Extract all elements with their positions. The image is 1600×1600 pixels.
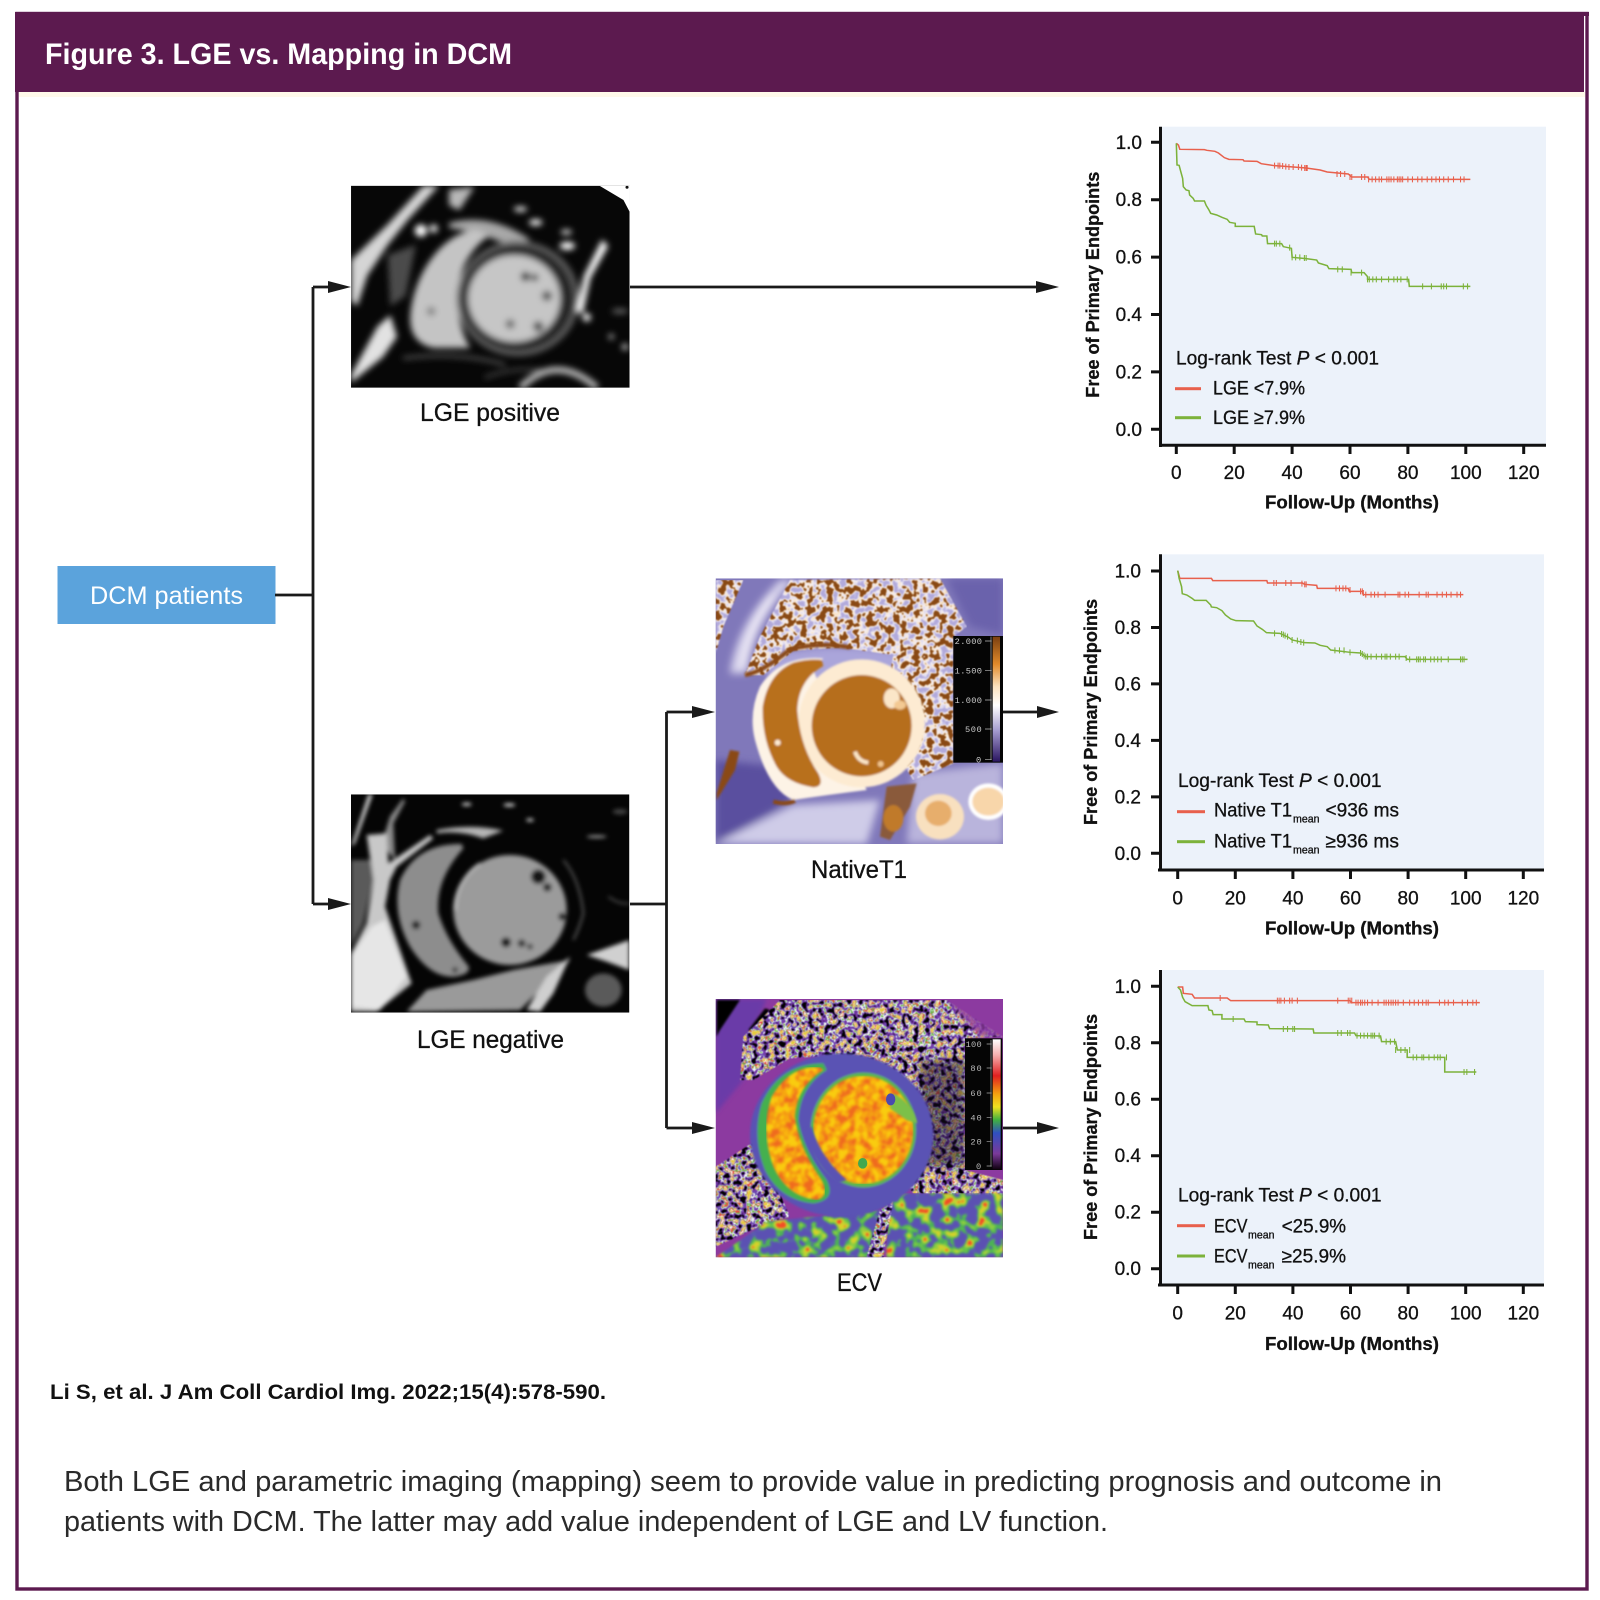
y axis tick labels: 0.0	[1116, 420, 1142, 441]
legend: T1 colour bar: 1.500	[955, 666, 982, 676]
y axis tick labels: 0.8	[1116, 190, 1142, 211]
header: title bar	[15, 12, 1589, 97]
label: LGE positive: LGE positive	[420, 399, 560, 427]
image: LGE positive scan	[351, 186, 630, 388]
legend: ECV colour bar: 40	[970, 1113, 982, 1123]
x axis tick labels: 80	[1397, 463, 1418, 484]
arrow: ECV to chart	[1003, 1122, 1059, 1134]
x axis tick labels: 120	[1507, 1303, 1539, 1324]
y axis tick labels: 0.2	[1116, 362, 1142, 383]
legend: ECV colour bar	[965, 1038, 1002, 1172]
curves	[1178, 571, 1468, 662]
x axis tick labels: 20	[1224, 463, 1245, 484]
legend: LGE <7.9%	[1213, 379, 1305, 400]
y axis tick labels: 0.6	[1115, 674, 1141, 695]
y axis tick labels: 0.4	[1116, 305, 1142, 326]
legend: T1 colour bar: 1.000	[955, 696, 982, 706]
speckle: pericardial fat	[745, 578, 967, 780]
legend: ECV	[1214, 1217, 1248, 1238]
y axis tick labels: 0.8	[1115, 1033, 1141, 1054]
image: ECV map	[716, 999, 1003, 1257]
x axis title: Follow-Up (Months)	[1265, 492, 1439, 512]
speckle: top and right	[740, 1000, 1003, 1197]
legend: ECV colour bar: 20	[970, 1138, 982, 1148]
legend: <25.9%	[1282, 1217, 1346, 1238]
image: LGE negative scan	[351, 794, 629, 1013]
x axis tick labels: 60	[1340, 888, 1361, 909]
y axis tick labels: 0.8	[1115, 618, 1141, 639]
legend: <936 ms	[1326, 801, 1399, 822]
y axis tick labels: 0.6	[1116, 248, 1142, 269]
legend: Log-rank Test P < 0.001	[1176, 348, 1379, 369]
legend: mean	[1248, 1230, 1274, 1242]
legend: ECV colour bar: 100	[966, 1040, 982, 1050]
x axis tick labels	[1171, 463, 1540, 484]
image: Native T1 map	[716, 578, 1008, 844]
y axis title: Free of Primary Endpoints	[1083, 172, 1103, 398]
legend: T1 colour bar: 500	[965, 725, 982, 735]
legend: Log-rank Test P < 0.001	[1178, 1186, 1382, 1207]
x axis tick labels: 20	[1225, 888, 1246, 909]
curves	[1176, 143, 1470, 289]
x axis tick labels: 100	[1450, 888, 1482, 909]
x axis title: Follow-Up (Months)	[1265, 918, 1439, 938]
legend: ≥25.9%	[1282, 1247, 1346, 1268]
legend: Native T1	[1214, 801, 1292, 822]
x axis tick labels: 120	[1507, 888, 1539, 909]
legend	[1177, 771, 1399, 856]
y axis tick labels: 1.0	[1116, 133, 1142, 154]
legend: T1 colour bar: 2.000	[955, 637, 982, 647]
x axis tick labels: 0	[1172, 1303, 1183, 1324]
arrow: Native T1 to chart	[1003, 706, 1059, 718]
y axis tick labels: 1.0	[1115, 562, 1141, 582]
legend: Log-rank Test P < 0.001	[1178, 771, 1382, 792]
legend	[1177, 1186, 1382, 1272]
x axis tick labels: 100	[1450, 463, 1482, 484]
brown arc above the heart	[745, 645, 850, 675]
legend: ECV colour bar: 0	[976, 1162, 981, 1172]
chart: LGE survival curves	[1083, 127, 1546, 512]
y axis title: Free of Primary Endpoints	[1081, 599, 1101, 825]
x axis tick labels: 120	[1508, 463, 1540, 484]
y axis tick labels	[1115, 977, 1141, 1280]
y axis tick labels: 0.2	[1115, 787, 1141, 808]
x axis tick labels: 40	[1282, 888, 1303, 909]
caption text: patients with DCM. The latter may add value independent of LGE and LV function.	[64, 1506, 1108, 1538]
legend: mean	[1293, 814, 1320, 826]
y axis tick labels: 0.6	[1115, 1090, 1141, 1111]
label: ECV: ECV	[837, 1269, 882, 1297]
y axis title: Free of Primary Endpoints	[1081, 1014, 1101, 1240]
chart: ECV survival curves	[1081, 970, 1544, 1354]
x axis tick labels: 60	[1340, 1303, 1361, 1324]
y axis tick labels	[1116, 133, 1142, 441]
legend	[1175, 348, 1379, 429]
caption text: Both LGE and parametric imaging (mapping) seem to provide value in predicting prognosis and outcome in	[64, 1466, 1442, 1498]
x axis tick labels: 0	[1172, 888, 1183, 909]
x axis tick labels: 0	[1171, 463, 1182, 484]
title: Figure 3. LGE vs. Mapping in DCM	[45, 38, 512, 71]
label: NativeT1: NativeT1	[811, 856, 907, 884]
legend: ECV	[1214, 1247, 1248, 1268]
legend: Native T1	[1214, 831, 1292, 852]
legend: ≥936 ms	[1326, 831, 1399, 852]
y axis tick labels: 1.0	[1115, 977, 1141, 998]
x axis tick labels	[1172, 1303, 1539, 1324]
legend: LGE ≥7.9%	[1213, 408, 1305, 429]
chart: Native T1 survival curves	[1081, 554, 1544, 938]
x axis tick labels: 80	[1398, 1303, 1419, 1324]
x axis tick labels: 40	[1282, 1303, 1303, 1324]
legend: ECV colour bar: 60	[970, 1089, 982, 1099]
y axis tick labels	[1115, 562, 1141, 865]
legend: T1 colour bar	[953, 636, 1003, 765]
speckle: lower body	[716, 1193, 1003, 1257]
x axis tick labels: 100	[1450, 1303, 1482, 1324]
y axis tick labels: 0.4	[1115, 1146, 1141, 1167]
box: DCM patients	[58, 566, 276, 624]
label: LGE negative: LGE negative	[417, 1026, 564, 1054]
legend: mean	[1293, 844, 1320, 856]
x axis tick labels: 60	[1339, 463, 1361, 484]
x axis tick labels: 80	[1398, 888, 1419, 909]
arrow: LGE positive to chart	[630, 281, 1059, 293]
y axis tick labels: 0.2	[1115, 1203, 1141, 1224]
caption text	[64, 1466, 1442, 1538]
y axis tick labels: 0.0	[1115, 844, 1141, 865]
arrow: DCM patients to LGE branches	[275, 281, 351, 910]
legend: ECV colour bar: 80	[970, 1064, 982, 1074]
box: DCM patients: DCM patients	[90, 582, 243, 610]
citation: Li S, et al. J Am Coll Cardiol Img. 2022;15(4):578-590.	[50, 1380, 606, 1404]
x axis tick labels: 20	[1225, 1303, 1246, 1324]
x axis tick labels	[1172, 888, 1539, 909]
curves	[1178, 987, 1480, 1075]
y axis tick labels: 0.4	[1115, 731, 1141, 752]
x axis title: Follow-Up (Months)	[1265, 1334, 1439, 1354]
legend: T1 colour bar: 0	[976, 755, 981, 765]
arrow: LGE negative to mapping images	[630, 706, 715, 1134]
x axis tick labels: 40	[1282, 463, 1303, 484]
legend: mean	[1248, 1260, 1274, 1272]
y axis tick labels: 0.0	[1115, 1259, 1141, 1280]
